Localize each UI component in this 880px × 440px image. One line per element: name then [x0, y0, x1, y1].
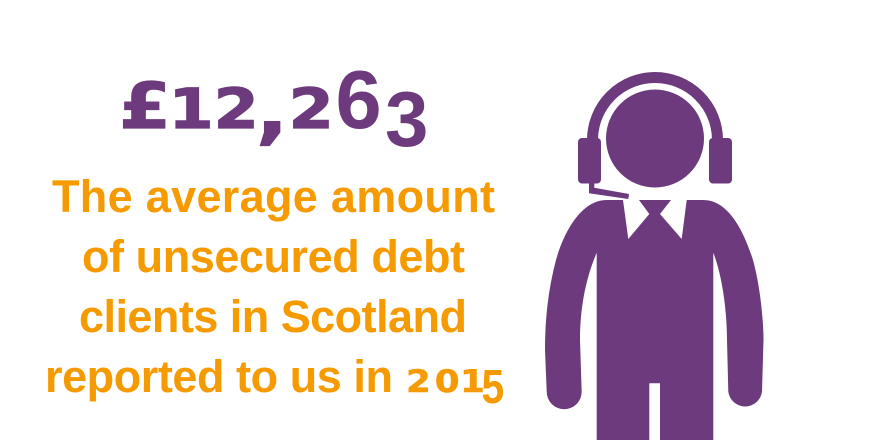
- right earcup: [709, 138, 732, 184]
- headline figure: £12,263: 1: [169, 78, 214, 142]
- left earcup: [578, 138, 601, 184]
- line 2: of unsecured debt: [82, 231, 465, 282]
- headline figure: £12,263: ,: [256, 68, 288, 152]
- headline figure: £12,263: [119, 53, 428, 163]
- headline figure: £12,263: £: [119, 70, 171, 144]
- headline figure: £12,263: 2: [289, 78, 334, 142]
- icon: call-centre agent with headset: [545, 78, 764, 440]
- line 3: clients in Scotland: [79, 291, 467, 342]
- headline figure: £12,263: 3: [385, 75, 428, 163]
- year 2015: [406, 361, 504, 414]
- body with arms, collar and tie: [545, 200, 764, 440]
- year 2015: 2: [406, 363, 431, 399]
- line 1: The average amount: [52, 171, 495, 222]
- microphone boom: [589, 183, 629, 199]
- headband: [592, 78, 718, 140]
- headline figure: £12,263: 6: [336, 53, 382, 146]
- head: [606, 90, 704, 188]
- year 2015: 0: [435, 363, 459, 399]
- description text: [45, 171, 504, 414]
- line 4: reported to us in: [45, 351, 393, 402]
- year 2015: 1: [460, 363, 485, 399]
- headline figure: £12,263: 2: [214, 78, 259, 142]
- year 2015: 5: [482, 361, 504, 414]
